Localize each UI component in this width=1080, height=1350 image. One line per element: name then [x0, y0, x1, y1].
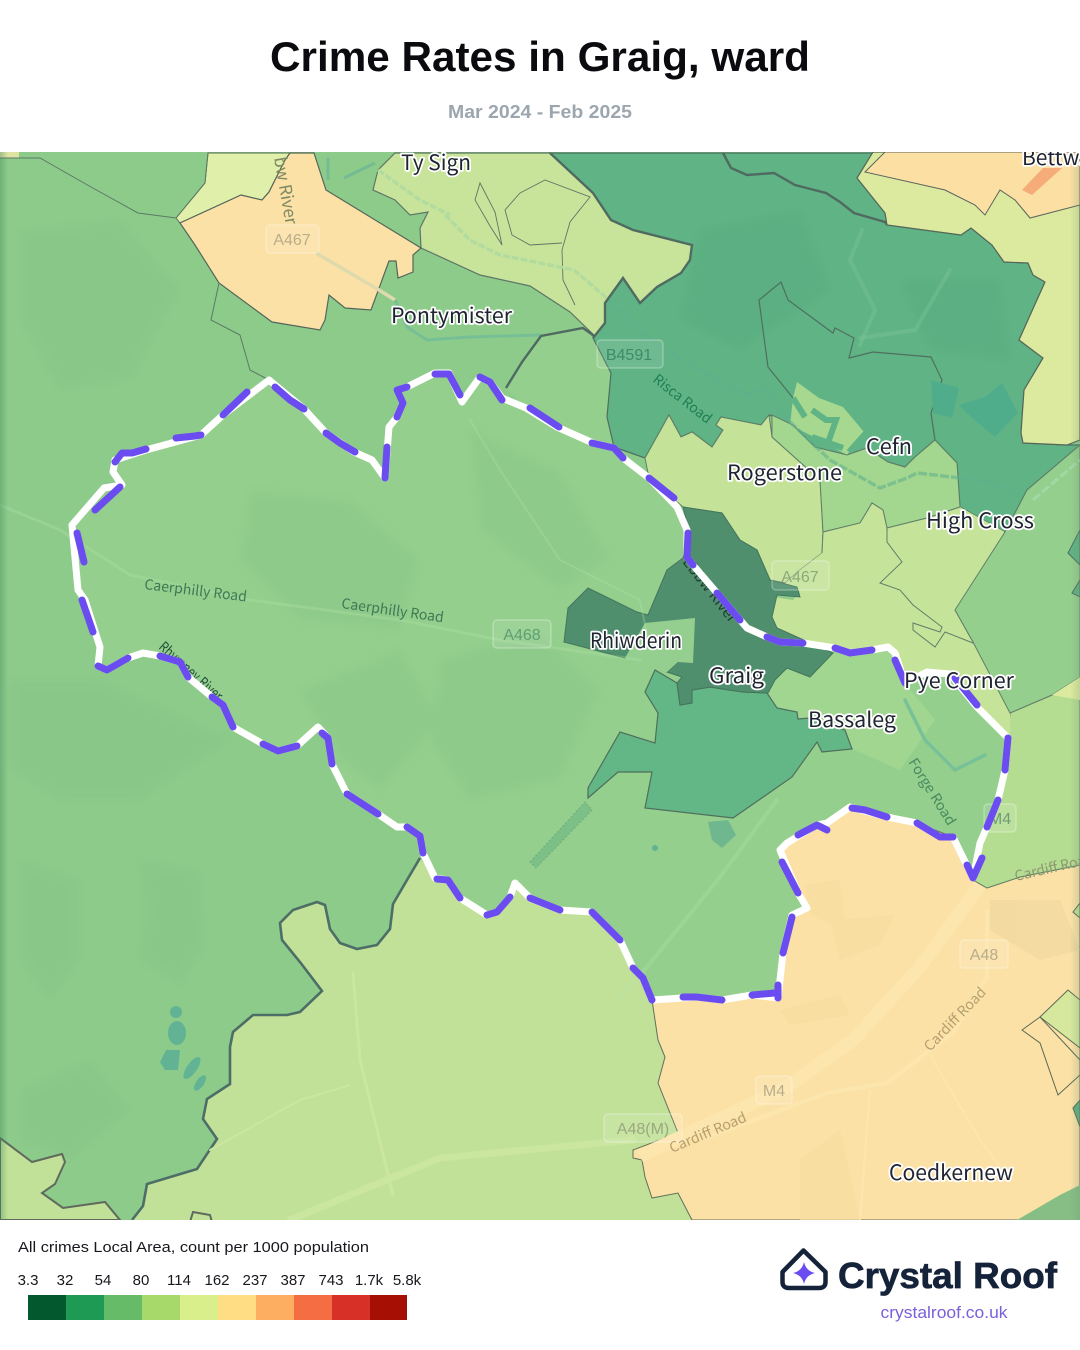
area: north-west orange: [180, 153, 421, 330]
area: Bassaleg lighter green: [768, 647, 935, 770]
west area thin outlines: [0, 153, 269, 380]
road and river names: [143, 155, 1080, 1158]
road and river names: Cardiff Road: [666, 1107, 749, 1158]
orange zone: darker patches: [800, 949, 1080, 1220]
road shield labels: M4: [763, 1083, 785, 1100]
Ty Sign interior outlines: [475, 180, 590, 305]
road and river names: Forge Road: [904, 754, 961, 829]
road shield labels: A48: [970, 947, 998, 964]
area: Graig mid-green: [588, 670, 852, 818]
road and river names: Ebbw River: [678, 553, 742, 627]
feature: striped solar farm: [530, 802, 592, 868]
subtitle: date range: Mar 2024 - Feb 2025: [448, 102, 632, 122]
place labels: Bassaleg: [808, 704, 896, 734]
legend values: [18, 1272, 422, 1289]
choropleth map: [0, 142, 1080, 1222]
area: north-east orange: [865, 152, 1080, 218]
area: north-west corner pale strip: [0, 152, 19, 158]
legend values: 32: [57, 1272, 73, 1289]
area: south-central pale green: [132, 858, 692, 1220]
map texture: soft woodland shading: [10, 220, 610, 1160]
legend values: 3.3: [18, 1272, 38, 1289]
area: east pale green strip: [973, 677, 1080, 888]
legend values: 162: [204, 1272, 230, 1289]
area: Rogerstone pale green: [645, 415, 823, 583]
area: High Cross pale green: [772, 504, 1010, 734]
map texture: north-east pale roads: [850, 230, 950, 345]
road and river names: Caerphilly Road: [143, 574, 248, 607]
area: Pontymister east mid green: [506, 328, 614, 447]
road shield labels: A468: [503, 627, 541, 644]
legend: [18, 1239, 422, 1320]
area: north-east pale yellow green: [857, 152, 1080, 445]
river near Pye Corner: [905, 700, 985, 770]
orange zone: motorway and roads: [640, 885, 1010, 1220]
logo wordmark: Crystal Roof: [838, 1255, 1058, 1296]
website link: crystalroof.co.uk: [880, 1304, 1008, 1322]
road and river names: bw River: [269, 155, 306, 226]
area: reservoir teal patches: [931, 380, 1018, 437]
area: far east small pale wedge: [1052, 677, 1080, 700]
legend values: 743: [318, 1272, 344, 1289]
road shields: [266, 225, 1016, 1142]
area: Bettws east mid green: [955, 445, 1080, 713]
place labels: Ty Sign: [401, 147, 471, 177]
road and river names: Caerphilly Road: [340, 593, 445, 627]
map texture: pale roads on bottom zone: [210, 973, 633, 1220]
legend title: All crimes Local Area, count per 1000 population: [18, 1239, 369, 1256]
map texture: dark green shading: [680, 210, 1010, 360]
road and river names: Rhymney River: [155, 637, 228, 706]
lake patches in west: [160, 820, 736, 1093]
area: south small outline: [190, 1212, 212, 1222]
legend values: 54: [95, 1272, 111, 1289]
road and river names: Risca Road: [649, 369, 716, 428]
place labels: High Cross: [926, 505, 1034, 535]
ward boundary: white line: [72, 373, 1008, 1000]
Cefn sub-area outline: [759, 282, 942, 440]
logo: Crystal Roof: [782, 1250, 1058, 1322]
title: Crime Rates in Graig, ward: [270, 33, 810, 80]
road shield labels: A48(M): [617, 1121, 669, 1138]
area: south-east pale and green insets: [1017, 903, 1080, 1220]
area: ward interior fill: [72, 373, 1008, 1000]
legend values: 114: [167, 1272, 191, 1289]
area: Rhiwderin light patch: [625, 618, 695, 672]
place labels: Cefn: [866, 431, 912, 461]
legend values: 80: [133, 1272, 149, 1289]
legend values: 5.8k: [393, 1272, 422, 1289]
area: south-east orange zone: [633, 807, 1080, 1220]
place labels: Pontymister: [391, 300, 513, 330]
area: Ty Sign pale green: [373, 153, 692, 338]
legend values: 387: [280, 1272, 306, 1289]
area: north-east dark green: [550, 153, 1080, 532]
road shield labels: [273, 232, 1011, 1138]
area: Cefn pale patch: [790, 382, 864, 455]
west boundary: thick river line: [132, 858, 420, 1220]
road shield labels: M4: [989, 811, 1011, 828]
place labels: Pye Corner: [904, 665, 1015, 695]
icon: house with star: [782, 1250, 826, 1288]
area: small deep orange patch: [1022, 168, 1062, 195]
river through Cefn south: [788, 420, 959, 490]
road shield labels: B4591: [606, 347, 652, 364]
thick outline: Pontymister east: [506, 328, 597, 388]
left and right edge vignette: [0, 152, 1080, 1220]
place labels: Rhiwderin: [590, 625, 682, 655]
map texture: pale roads: [0, 420, 777, 1000]
place labels: Coedkernew: [889, 1157, 1013, 1187]
High Cross interior outlines: [822, 502, 974, 648]
road and river names: Cardiff Road: [919, 983, 991, 1055]
area: far east dark patches: [1068, 530, 1080, 597]
area: Cefn south mid-green: [772, 415, 960, 532]
road shield labels: A467: [273, 232, 311, 249]
area: Graig darkest green: [564, 507, 833, 705]
Cefn dark street cells: [793, 398, 866, 457]
stream in the east mid-green area: [1033, 460, 1080, 500]
orange river and stream lines: [316, 253, 395, 300]
legend colour scale: [28, 1295, 407, 1320]
north ridge thick outline: [550, 153, 887, 338]
legend values: 237: [242, 1272, 268, 1289]
place labels: Graig: [709, 660, 764, 690]
road shield labels: A467: [781, 569, 819, 586]
ward boundary: purple dashes: [77, 374, 1008, 1000]
area: Ty Sign river strip: [378, 170, 609, 300]
legend values: 1.7k: [355, 1272, 384, 1289]
area: south-west pale corner: [0, 1138, 120, 1220]
place labels: Rogerstone: [727, 457, 842, 487]
area: north-west pale wedge: [176, 153, 290, 223]
place labels: [391, 142, 1080, 1187]
